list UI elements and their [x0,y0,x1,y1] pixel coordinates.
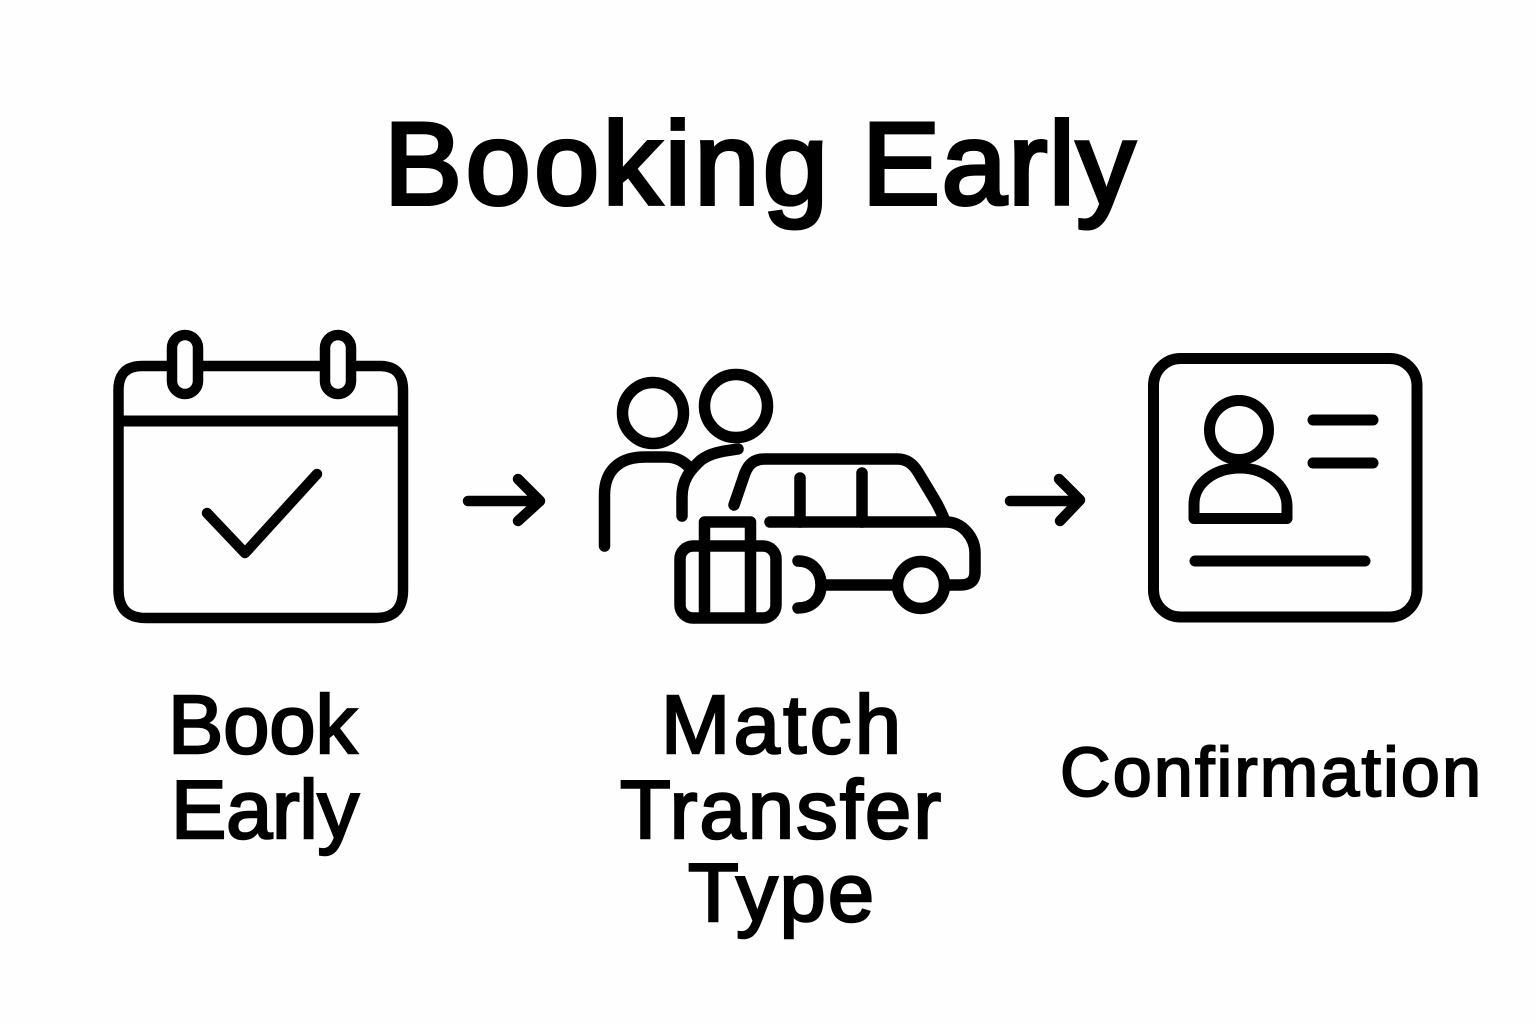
label: Match Transfer Type [620,678,941,939]
icon: van [734,459,975,608]
title: Early [862,98,1136,229]
label: Match Transfer Type: Transfer [620,763,941,856]
label: Book Early: Early [171,763,360,856]
icon: passenger left [604,382,690,546]
arrow: transfer to confirmation [1010,479,1080,521]
icon: passengers, luggage and van [604,374,975,618]
icon: suitcase [680,522,776,618]
title [384,98,1136,229]
label: Match Transfer Type: Match [661,678,901,771]
title: Booking [384,98,828,229]
label: Book Early: Book [168,678,358,771]
label: Book Early [168,678,360,856]
icon: ID card confirmation [1154,358,1417,617]
label: Match Transfer Type: Type [688,846,874,939]
icon: passenger right [682,374,768,516]
arrow: calendar to transfer [468,479,540,521]
label: Confirmation: Confirmation [1060,733,1481,811]
icon: calendar with check mark [118,335,403,618]
